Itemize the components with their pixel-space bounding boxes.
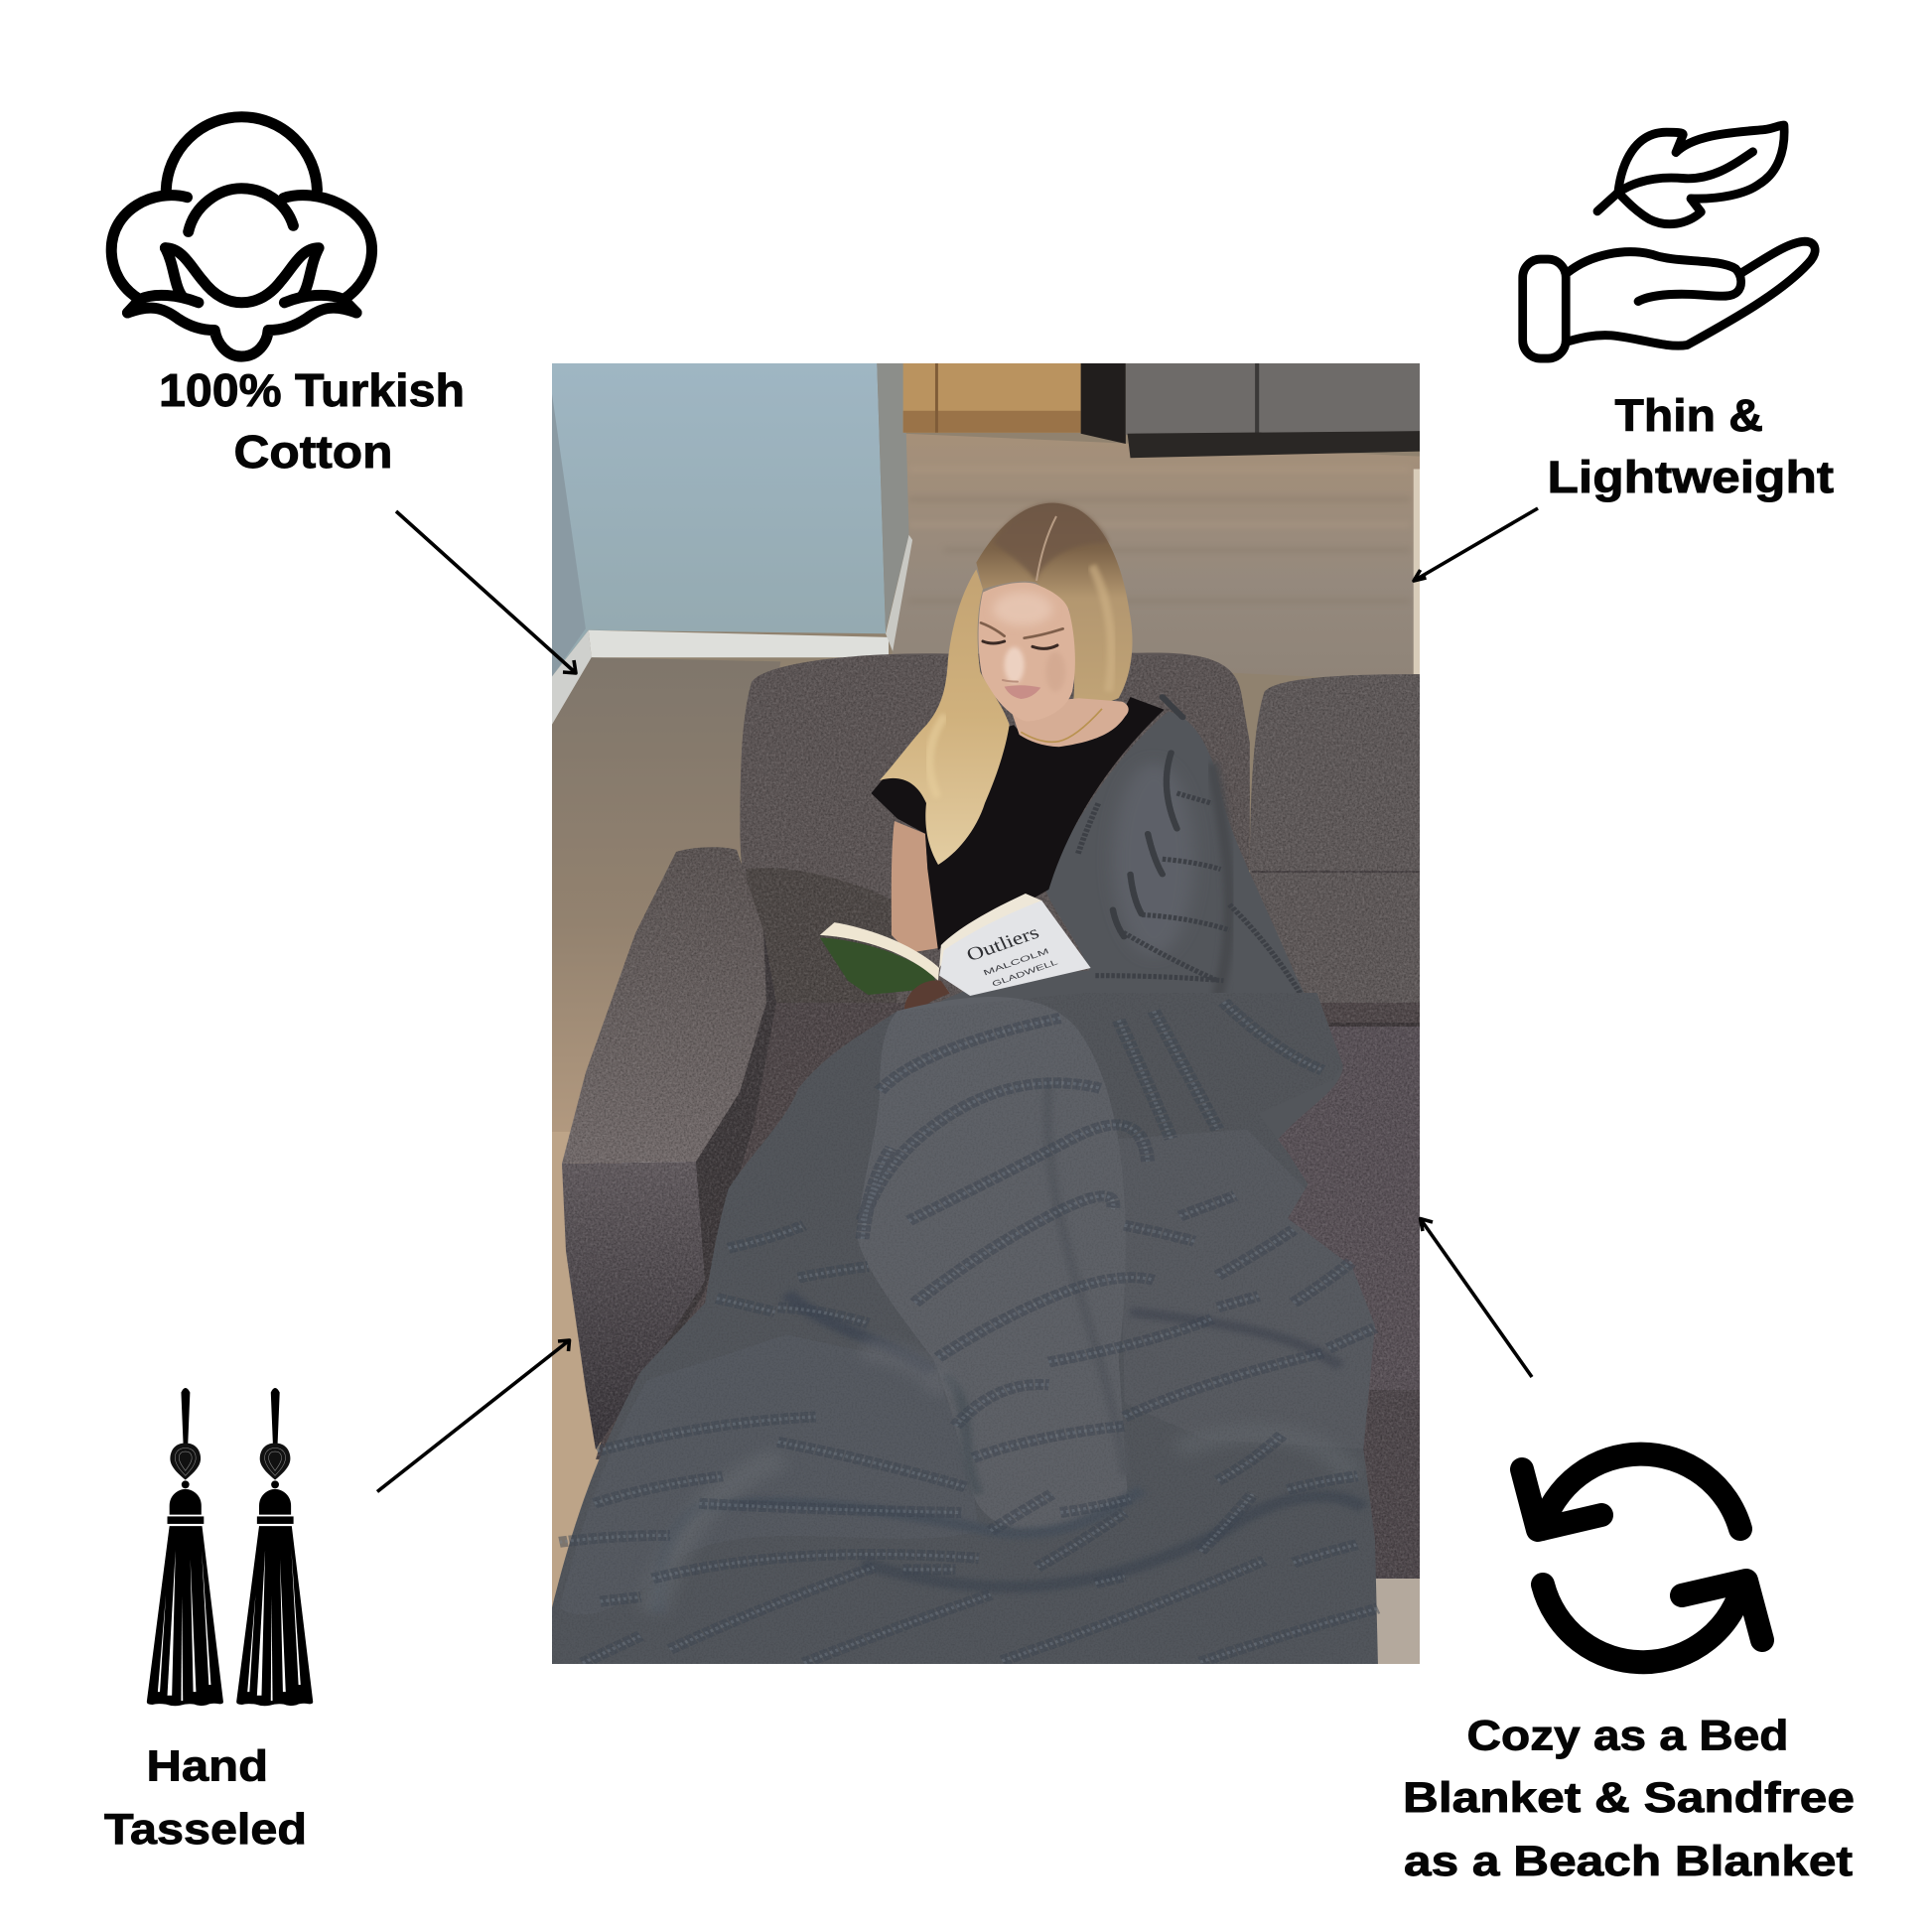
- black t-shirt: [871, 697, 1165, 950]
- centre leg fold: [857, 997, 1128, 1531]
- face: [979, 583, 1075, 722]
- blanket woven stripes, light stitches: [559, 1002, 1378, 1663]
- upper blanket draped over shoulder: [940, 694, 1342, 1140]
- icon: feather above open hand: [1523, 125, 1815, 358]
- label: 100% Turkish Cotton: 100% Turkish: [159, 364, 465, 416]
- arm: [892, 821, 941, 953]
- neck and chest: [1010, 698, 1129, 747]
- woman reading: [820, 503, 1165, 1016]
- right blanket fold: [1119, 1130, 1375, 1449]
- label: 100% Turkish Cotton: Cotton: [234, 426, 393, 478]
- label: Thin & Lightweight: Lightweight: [1547, 452, 1834, 502]
- label: Thin & Lightweight: Thin &: [1614, 390, 1763, 441]
- sofa: back cushions, arm and seat: [562, 653, 1420, 1664]
- long blonde hair: [880, 569, 1010, 865]
- book: outliers: Outliers: [963, 922, 1042, 966]
- arrow: tassels to photo: [377, 1340, 570, 1491]
- photo background: room with wall, cabinets and floor: [552, 362, 1420, 1143]
- label: Hand Tasseled: [104, 1741, 307, 1854]
- feature: cozy bed and beach blanket: [1403, 1219, 1855, 1885]
- label: Cozy as a Bed Blanket & Sandfree as a Beach Blanket: [1403, 1712, 1855, 1885]
- lower blanket covering legs: [552, 993, 1378, 1664]
- book: outliers: [820, 894, 1091, 996]
- lower left wooden floor: [552, 1132, 621, 1607]
- necklace: [1021, 709, 1102, 742]
- label: Thin & Lightweight: [1547, 390, 1834, 502]
- label: Cozy as a Bed Blanket & Sandfree as a Beach Blanket: Cozy as a Bed: [1467, 1712, 1789, 1759]
- arrow: cotton to photo: [396, 511, 576, 673]
- icon: pair of tassels: [147, 1388, 313, 1706]
- hair behind the face: [976, 503, 1133, 715]
- label: Hand Tasseled: Hand: [147, 1741, 268, 1791]
- blanket fold shadows: [658, 1084, 1363, 1613]
- arrow: lightweight to photo: [1414, 508, 1538, 581]
- product photo: woman reading under a grey blanket on a sofa: [552, 362, 1420, 1664]
- hands holding the book: [904, 980, 950, 1016]
- feature: thin and lightweight: [1414, 125, 1834, 581]
- hair roots and parting: [993, 503, 1109, 581]
- label: Hand Tasseled: Tasseled: [104, 1805, 307, 1854]
- sofa fabric texture: [552, 655, 1420, 1588]
- blanket fabric texture: [552, 993, 1420, 1664]
- arrow: cozy to photo: [1420, 1219, 1532, 1377]
- blanket fold highlights: [652, 1348, 1352, 1613]
- book: outliers: MALCOLM: [982, 947, 1050, 977]
- label: Cozy as a Bed Blanket & Sandfree as a Beach Blanket: as a Beach Blanket: [1404, 1838, 1853, 1885]
- feature: 100% Turkish cotton: [111, 117, 576, 673]
- blanket woven stripes, dark weave: [559, 1002, 1378, 1663]
- book: outliers: GLADWELL: [991, 958, 1059, 989]
- head, hair and neck: [880, 503, 1133, 865]
- feature: hand tasseled: [104, 1340, 570, 1854]
- label: Cozy as a Bed Blanket & Sandfree as a Beach Blanket: Blanket & Sandfree: [1403, 1774, 1855, 1822]
- icon: circular arrows: [1522, 1454, 1762, 1662]
- left blanket fold: [559, 1334, 979, 1614]
- label: 100% Turkish Cotton: [159, 364, 465, 478]
- icon: cotton boll: [111, 117, 372, 356]
